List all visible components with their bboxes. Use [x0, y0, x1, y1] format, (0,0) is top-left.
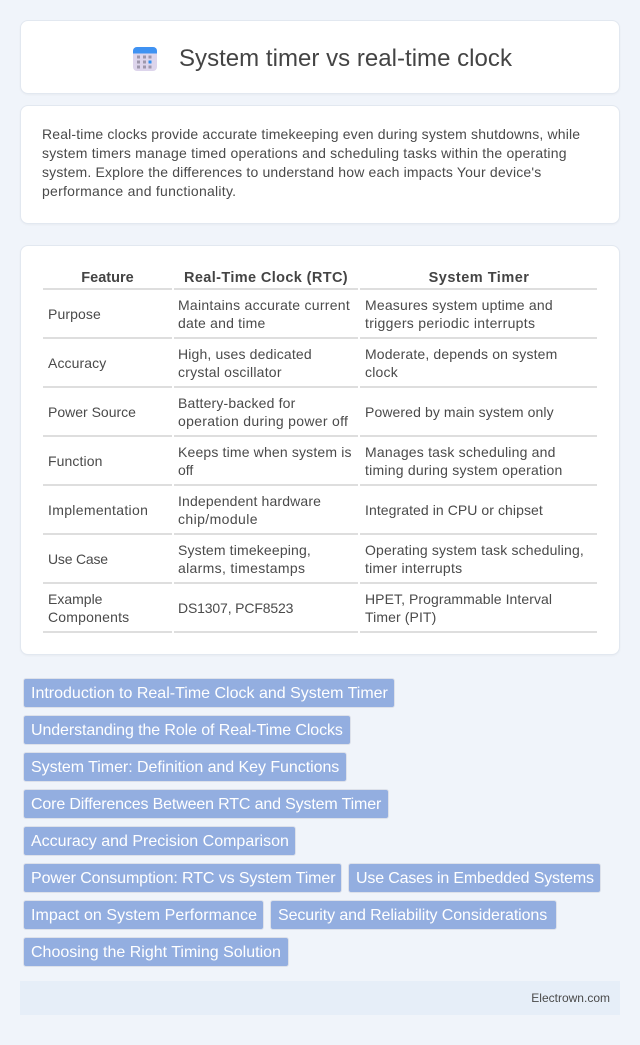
- row: example components: Timer (PIT): [365, 609, 436, 625]
- row: power source: Powered by main system only: [365, 404, 554, 420]
- intro text: Real-time clocks provide accurate timekeeping even during system shutdowns, while: [42, 126, 580, 142]
- row: purpose: Measures system uptime and: [365, 297, 553, 313]
- row: function: timing during system operation: [365, 462, 563, 478]
- table header row: [81, 270, 529, 286]
- table header row: Feature: [81, 270, 134, 286]
- table header row: System Timer: [429, 270, 529, 286]
- panel: comparison table: [20, 245, 620, 655]
- footer: [20, 981, 620, 1015]
- row: power source: Power Source: [48, 404, 136, 420]
- topic: introduction: Introduction to Real-Time Clock and System Timer: [31, 685, 388, 702]
- topic: introduction: [23, 678, 395, 708]
- topic links: [23, 678, 601, 967]
- icon: calendar: [133, 47, 157, 71]
- row: use case: [48, 542, 584, 576]
- row: function: Manages task scheduling and: [365, 444, 556, 460]
- topic: core differences: [23, 789, 389, 819]
- row: use case: Operating system task scheduling,: [365, 542, 584, 558]
- row: example components: Example: [48, 591, 102, 607]
- row: purpose: [48, 297, 553, 331]
- row: purpose: triggers periodic interrupts: [365, 315, 535, 331]
- row: implementation: chip/module: [178, 511, 258, 527]
- title: System timer vs real-time clock: [179, 45, 512, 72]
- row: use case: Use Case: [48, 551, 108, 567]
- topic: system performance: [23, 900, 264, 930]
- topic: power consumption: [23, 863, 342, 893]
- topic: choosing timing solution: [23, 937, 289, 967]
- topic: core differences: Core Differences Between RTC and System Timer: [31, 796, 381, 813]
- row: accuracy: Moderate, depends on system: [365, 346, 557, 362]
- panel: introduction: [20, 105, 620, 224]
- topic: accuracy and precision: Accuracy and Precision Comparison: [31, 833, 289, 850]
- row: function: off: [178, 462, 193, 478]
- row: example components: [48, 591, 552, 625]
- row: purpose: Purpose: [48, 306, 101, 322]
- row: example components: DS1307, PCF8523: [178, 600, 293, 616]
- row: purpose: Maintains accurate current: [178, 297, 350, 313]
- intro text: system timers manage timed operations and scheduling tasks within the operating: [42, 145, 567, 161]
- topic: use cases: [348, 863, 601, 893]
- topic: use cases: Use Cases in Embedded Systems: [356, 870, 594, 887]
- topic: security and reliability: [270, 900, 557, 930]
- row: accuracy: High, uses dedicated: [178, 346, 312, 362]
- topic: role of real-time clocks: [23, 715, 351, 745]
- topic: accuracy and precision: [23, 826, 296, 856]
- row: power source: [48, 395, 554, 429]
- row: accuracy: [48, 346, 557, 380]
- row: accuracy: Accuracy: [48, 355, 106, 371]
- table header row: Real-Time Clock (RTC): [184, 270, 348, 286]
- row: example components: HPET, Programmable Interval: [365, 591, 552, 607]
- row: accuracy: clock: [365, 364, 398, 380]
- topic: system performance: Impact on System Performance: [31, 907, 257, 924]
- topic: choosing timing solution: Choosing the Right Timing Solution: [31, 944, 281, 961]
- panel: header: [20, 20, 620, 94]
- row: function: [48, 444, 563, 478]
- row: power source: operation during power off: [178, 413, 348, 429]
- topic: security and reliability: Security and Reliability Considerations: [278, 907, 547, 924]
- footer credit: Electrown.com: [531, 991, 610, 1005]
- row: function: Function: [48, 453, 102, 469]
- row: example components: Components: [48, 609, 129, 625]
- topic: power consumption: Power Consumption: RTC vs System Timer: [31, 870, 335, 887]
- topic: system timer definition: [23, 752, 347, 782]
- intro text: [42, 126, 580, 199]
- topic: role of real-time clocks: Understanding the Role of Real-Time Clocks: [31, 722, 343, 739]
- comparison table: [43, 270, 597, 633]
- row: power source: Battery-backed for: [178, 395, 295, 411]
- intro text: system. Explore the differences to understand how each impacts Your device's: [42, 164, 541, 180]
- row: implementation: [48, 493, 543, 527]
- row: use case: System timekeeping,: [178, 542, 311, 558]
- row: implementation: Integrated in CPU or chipset: [365, 502, 543, 518]
- row: accuracy: crystal oscillator: [178, 364, 282, 380]
- row: function: Keeps time when system is: [178, 444, 352, 460]
- row: use case: alarms, timestamps: [178, 560, 305, 576]
- row: implementation: Independent hardware: [178, 493, 321, 509]
- intro text: performance and functionality.: [42, 183, 236, 199]
- topic: system timer definition: System Timer: Definition and Key Functions: [31, 759, 339, 776]
- row: implementation: Implementation: [48, 502, 148, 518]
- row: purpose: date and time: [178, 315, 265, 331]
- row: use case: timer interrupts: [365, 560, 462, 576]
